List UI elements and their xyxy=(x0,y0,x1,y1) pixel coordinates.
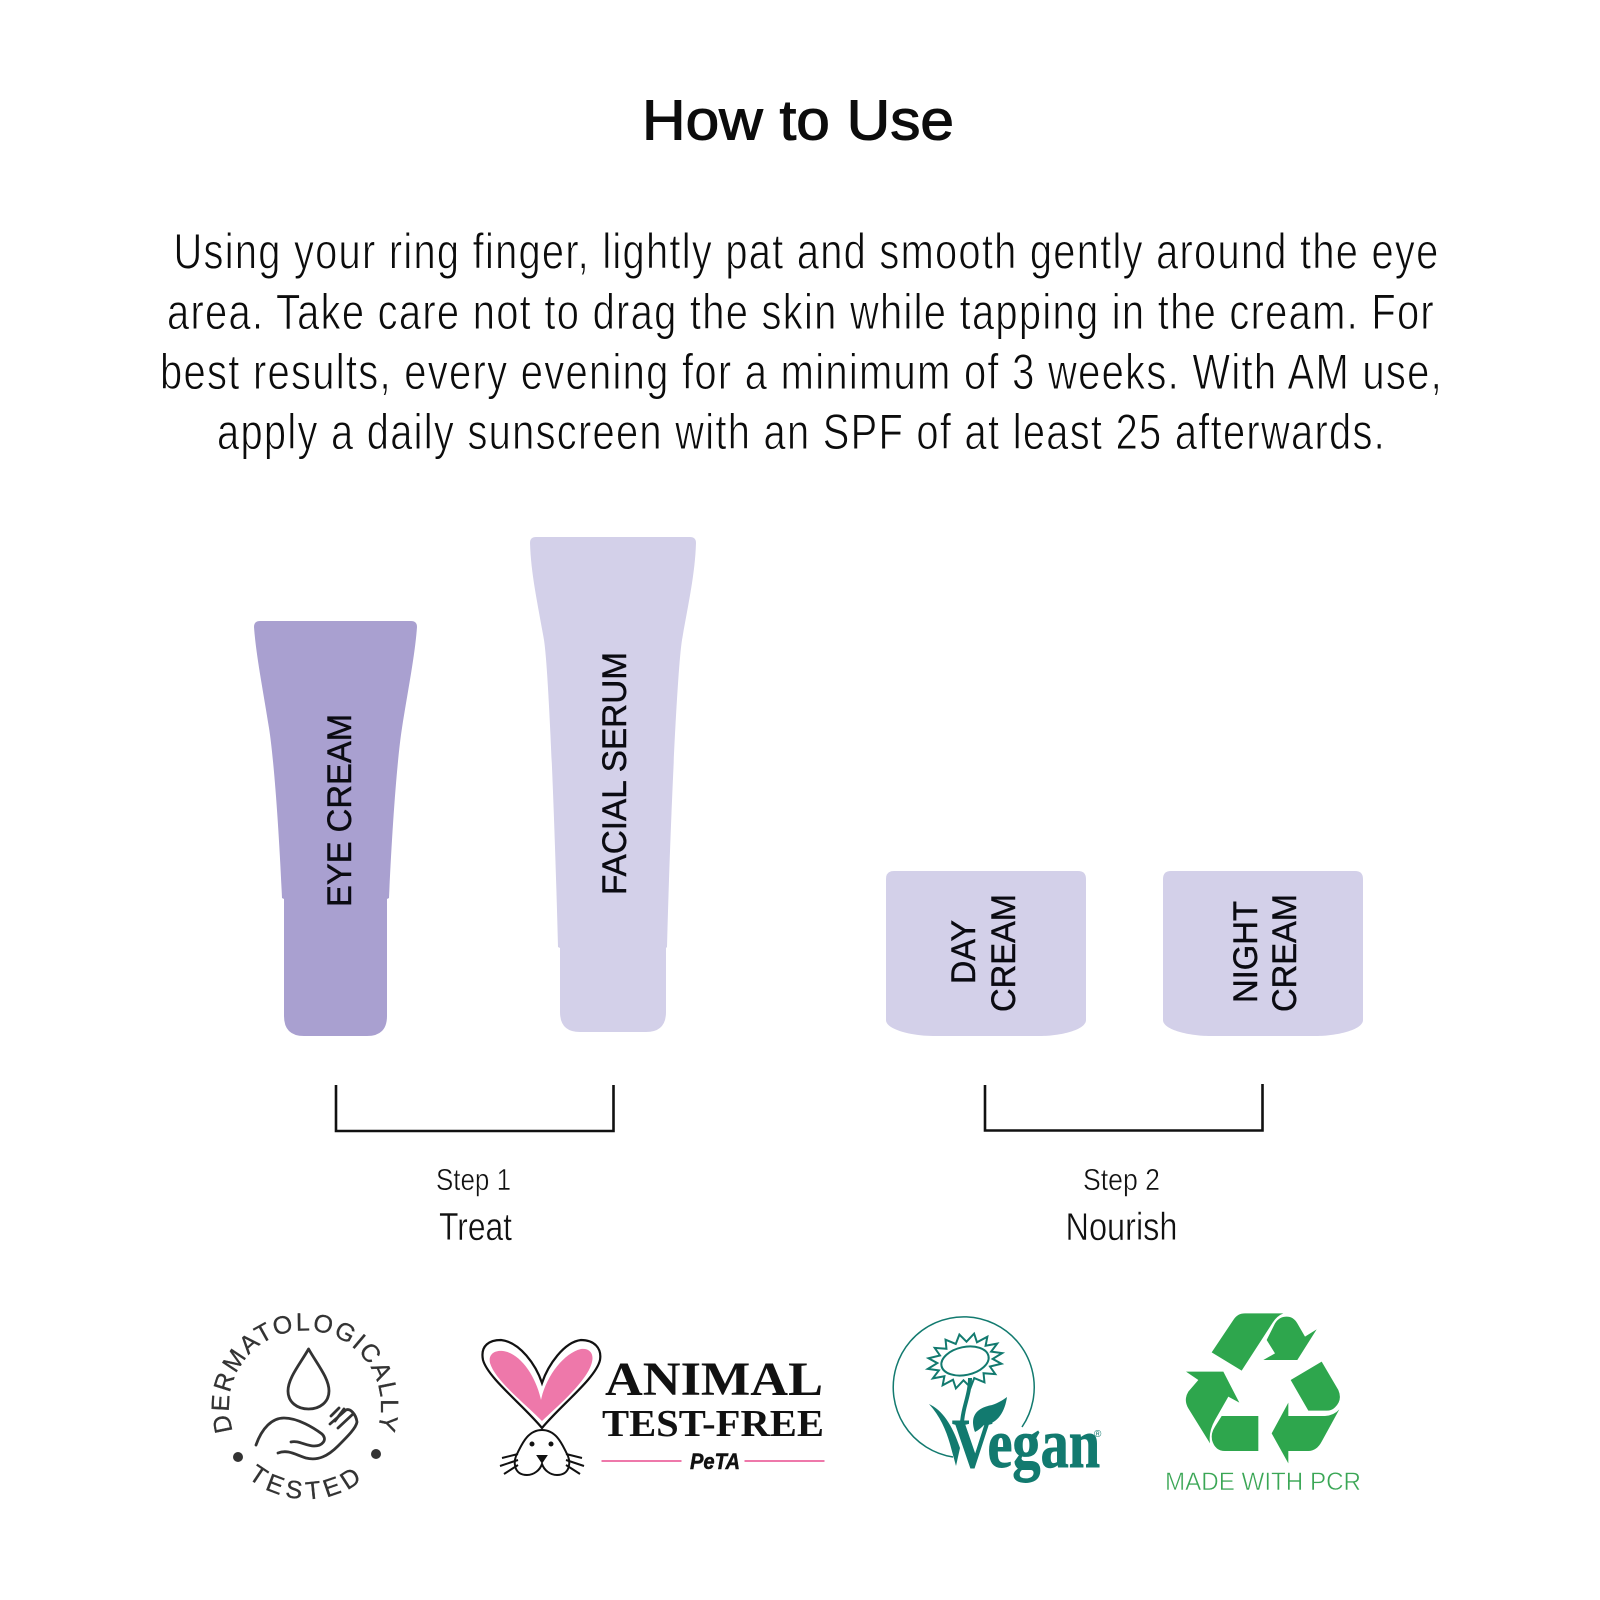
label: step 2 nourish: Nourish xyxy=(1066,1206,1178,1249)
badge: dermatologically tested xyxy=(211,1313,398,1500)
badge: peta animal test-free xyxy=(482,1340,824,1475)
tube: eye cream: EYE CREAM xyxy=(321,714,359,907)
peta line: PeTA xyxy=(690,1449,740,1474)
label: step 1 treat xyxy=(436,1162,512,1249)
bracket: step 2 xyxy=(985,1084,1262,1130)
jar: day cream: DAY xyxy=(945,920,983,984)
label: step 1 treat: Treat xyxy=(439,1206,512,1249)
text: made with pcr: MADE WITH PCR xyxy=(1165,1468,1361,1496)
badge: made with pcr xyxy=(1165,1313,1361,1496)
badge arc lettering: TESTED xyxy=(252,1464,358,1500)
badge arc lettering: DERMATOLOGICALLY xyxy=(211,1313,398,1433)
jar: day cream: CREAM xyxy=(985,894,1023,1012)
jar: day cream xyxy=(886,871,1086,1036)
tube: facial serum: FACIAL SERUM xyxy=(596,652,634,895)
tube: facial serum xyxy=(530,537,696,1032)
icon: hand xyxy=(256,1408,357,1459)
tube: eye cream xyxy=(254,621,417,1036)
label: step 2 nourish xyxy=(1066,1162,1178,1249)
instructions paragraph xyxy=(160,224,1443,460)
jar: night cream: CREAM xyxy=(1266,894,1304,1012)
registered mark: ® xyxy=(1094,1429,1102,1440)
text: test-free: TEST-FREE xyxy=(602,1403,824,1445)
badge: vegan xyxy=(893,1317,1102,1483)
jar: night cream: NIGHT xyxy=(1227,901,1265,1003)
icon: ring xyxy=(893,1317,1034,1457)
title: How to Use xyxy=(642,88,954,152)
text: animal: ANIMAL xyxy=(605,1353,823,1406)
icon: stem and leaves xyxy=(929,1378,1007,1466)
label: step 1 treat: Step 1 xyxy=(436,1162,511,1197)
icon: sunflower xyxy=(922,1327,1008,1395)
text: vegan: Vegan xyxy=(952,1406,1100,1483)
icon: bunny face xyxy=(500,1430,584,1475)
icon: recycling arrows xyxy=(1186,1313,1340,1463)
badge arc lettering xyxy=(211,1313,398,1500)
label: step 2 nourish: Step 2 xyxy=(1083,1162,1160,1197)
icon: bunny ears xyxy=(482,1340,600,1428)
bracket: step 1 xyxy=(336,1085,614,1131)
icon: drop xyxy=(288,1349,329,1409)
jar: night cream xyxy=(1163,871,1363,1036)
